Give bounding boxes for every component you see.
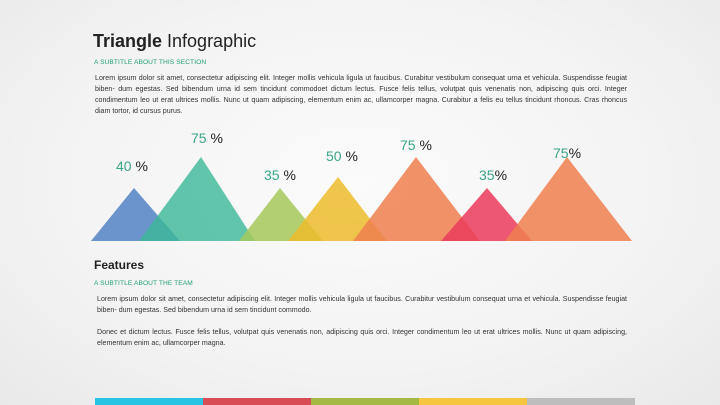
triangle: orange 75%	[353, 157, 480, 241]
triangle: orange 75% right	[505, 157, 632, 241]
label 75% right: 75%	[553, 145, 581, 161]
triangle chart	[91, 157, 632, 241]
features text 1: Lorem ipsum dolor sit amet, consectetur adipiscing elit. Integer mollis vehicula ligula ut faucibus. Curabitur vestibulum consequat urna et vehicula. Suspendisse feugiat biben- dum egestas. Sed bibendum urna id sem tincidunt commodo.	[97, 295, 627, 314]
label 35%: 35 %	[264, 167, 296, 183]
label 50%: 50 %	[326, 148, 358, 164]
intro text: Lorem ipsum dolor sit amet, consectetur adipiscing elit. Integer mollis vehicula ligula ut faucibus. Curabitur vestibulum consequat urna et vehicula. Suspendisse feugiat biben- dum egestas. Sed bibendum urna id sem tincidunt commodoet dictum lectus. Fusce felis tellus, volutpat quis venenatis non, adipiscing quis orci. Integer condimentum leo ut erat ultrices mollis. Nunc ut quam adipiscing, elementum enim ac, ullamcorper magna. Curabitur a felis eu tellus tincidunt rhoncus. Cras rhoncus diam tortor, id cursus purus.	[95, 74, 627, 115]
triangle: yellow 50%	[288, 177, 387, 241]
triangle: green 35%	[239, 188, 323, 241]
features subtitle: A SUBTITLE ABOUT THE TEAM	[94, 280, 193, 287]
label 40%: 40 %	[116, 158, 148, 174]
triangle: blue 40%	[91, 188, 180, 241]
triangle: pink 35%	[441, 188, 532, 241]
triangle: teal 75%	[139, 157, 255, 241]
features heading: Features	[94, 258, 144, 272]
title: Triangle Infographic	[93, 31, 256, 51]
subtitle: A SUBTITLE ABOUT THIS SECTION	[94, 59, 206, 66]
features text 2: Donec et dictum lectus. Fusce felis tellus, volutpat quis venenatis non, adipiscing quis orci. Integer condimentum leo ut erat ultrices mollis. Nunc ut quam adipiscing, elementum enim ac, ullamcorper magna.	[97, 328, 627, 347]
label 75% center: 75 %	[400, 137, 432, 153]
label 75%: 75 %	[191, 130, 223, 146]
label 35% right: 35%	[479, 167, 507, 183]
bottom color bar	[95, 398, 635, 405]
